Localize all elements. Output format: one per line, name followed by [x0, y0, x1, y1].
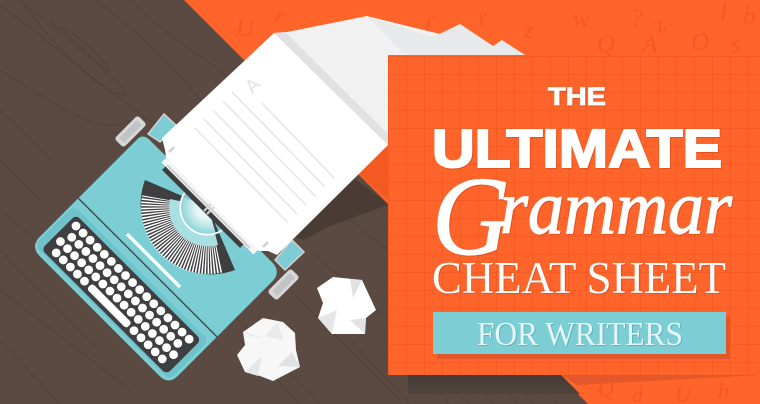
- faint script letters: s: [731, 31, 741, 58]
- text lines: [195, 92, 334, 223]
- keyboard body: [30, 198, 217, 385]
- faint script letters: A: [640, 31, 658, 58]
- dark fan sector: [141, 180, 235, 274]
- carriage strip: [164, 160, 256, 252]
- crumpled ball right: [317, 277, 376, 334]
- crumpled ball left: [237, 318, 300, 381]
- bottom script letters: h: [718, 378, 729, 403]
- left roller knob: [114, 115, 147, 148]
- faint script letters: z: [647, 11, 670, 40]
- bottom script letters: [598, 376, 729, 404]
- faint script letters: w: [573, 6, 590, 33]
- carriage rail: [167, 165, 250, 248]
- faint script letters: z: [523, 17, 534, 44]
- glowing centre: [180, 196, 216, 235]
- keyboard plate: [41, 215, 201, 374]
- banner shadow: [437, 317, 730, 359]
- typed sheet: [162, 33, 388, 255]
- back sheet: [274, 16, 525, 145]
- faint script letters: O: [691, 29, 709, 56]
- banner text: FOR WRITERS: [477, 316, 683, 353]
- faint script letters: ?: [630, 5, 643, 32]
- panel shadow: [408, 375, 580, 394]
- orange title panel: [388, 56, 760, 375]
- key tray: [34, 205, 209, 380]
- paper stack: [274, 16, 525, 145]
- heading: Ultimate: ULTIMATE: [432, 119, 722, 179]
- typewriter: [30, 114, 304, 385]
- heading: Cheat Sheet: CHEAT SHEET: [432, 253, 726, 303]
- fold shadow: [274, 32, 388, 145]
- heading: Grammar: G: [432, 155, 510, 279]
- heading: The: THE: [548, 83, 606, 111]
- faint script letters: U: [236, 15, 256, 42]
- type fan: [140, 180, 235, 274]
- upper body: [78, 133, 282, 337]
- right roller knob: [267, 268, 300, 301]
- teal banner: [433, 312, 726, 354]
- letter A: A: [241, 74, 265, 98]
- paper clips: [169, 147, 268, 247]
- body divider: [78, 198, 217, 337]
- right bracket: [275, 240, 304, 270]
- bottom sheet shadow: [561, 375, 760, 385]
- paper shadow on desk: [295, 178, 388, 240]
- faint script letters: Q: [597, 31, 615, 58]
- type hammer: [204, 204, 214, 214]
- white ring: [180, 191, 225, 235]
- white bar: [127, 234, 180, 287]
- bottom script letters: Q: [598, 376, 614, 401]
- paper shadow on orange: [354, 147, 388, 200]
- teal inner sector: [169, 199, 218, 246]
- heading: Grammar: rammar: [500, 166, 732, 250]
- platen slit: [164, 168, 242, 246]
- faint script letters: [236, 0, 756, 58]
- faint script letters: f: [424, 14, 434, 41]
- torn top sheet: [367, 16, 525, 55]
- left bracket: [148, 114, 178, 142]
- white spokes: [141, 195, 222, 274]
- faint script letters: b: [743, 3, 756, 30]
- grid lines: [388, 56, 760, 375]
- orange background: [184, 0, 760, 404]
- faint script letters: r: [473, 4, 492, 33]
- keys: [46, 220, 195, 369]
- faint script letters: r: [271, 2, 290, 31]
